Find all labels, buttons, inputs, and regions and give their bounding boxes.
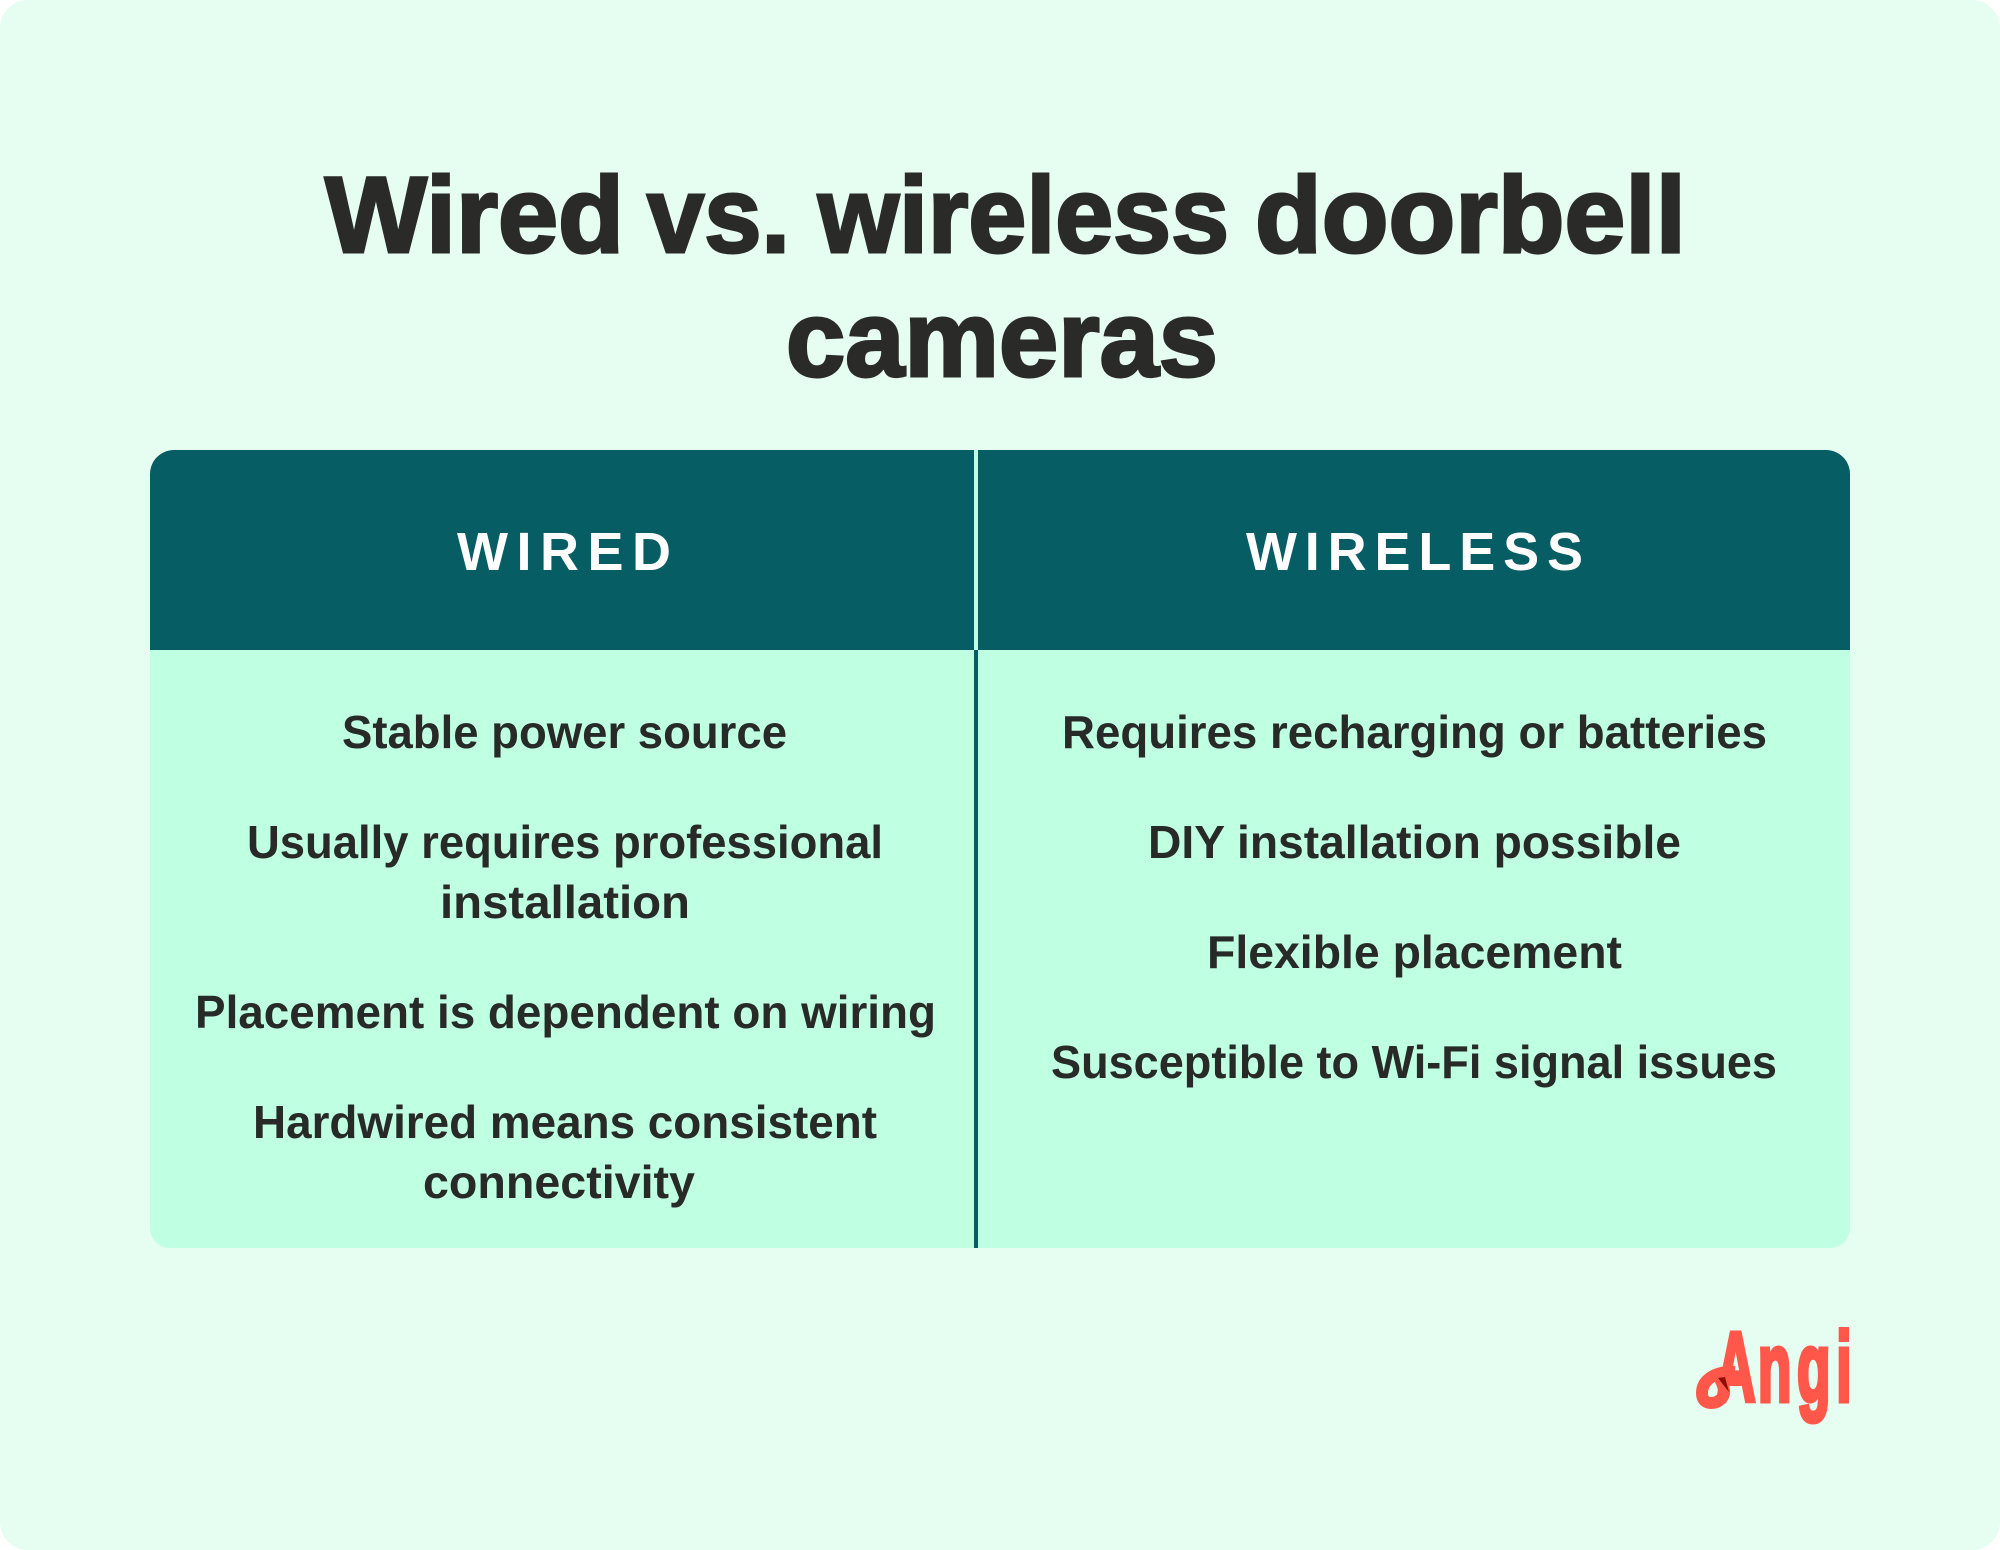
title [325, 154, 1686, 399]
item: professional installation: installation [440, 876, 690, 928]
item: Wi-Fi signal issues: Susceptible to Wi-Fi signal issues [1051, 1036, 1777, 1088]
body divider [974, 650, 978, 1248]
title: doorbell [1255, 154, 1686, 275]
item: flexible placement: Flexible placement [1207, 926, 1622, 978]
item: professional installation: Usually requires professional [247, 816, 883, 868]
item: consistent connectivity [253, 1096, 877, 1208]
item: consistent connectivity: connectivity [423, 1156, 695, 1208]
panel: comparison table [150, 450, 1850, 1248]
item: DIY installation: DIY installation possible [1148, 816, 1681, 868]
title: Wired [325, 154, 624, 275]
column heading: wireless: WIRELESS [1246, 522, 1583, 582]
item: stable power source: Stable power source [342, 706, 787, 758]
item: consistent connectivity: Hardwired means consistent [253, 1096, 877, 1148]
logo: Angi: Angi [1716, 1312, 1851, 1422]
item: recharging or batteries: Requires recharging or batteries [1062, 706, 1767, 758]
item: placement depends on wiring: Placement is dependent on wiring [195, 986, 936, 1038]
header divider [974, 450, 978, 650]
wireless column items [1051, 706, 1777, 1088]
table header [150, 450, 1850, 650]
title: wireless [817, 154, 1229, 275]
wired column items [195, 706, 936, 1208]
title: vs. [647, 154, 790, 275]
table body [150, 600, 1850, 1248]
item: professional installation [247, 816, 883, 928]
title: cameras [786, 278, 1218, 399]
column heading: wired: WIRED [457, 522, 671, 582]
